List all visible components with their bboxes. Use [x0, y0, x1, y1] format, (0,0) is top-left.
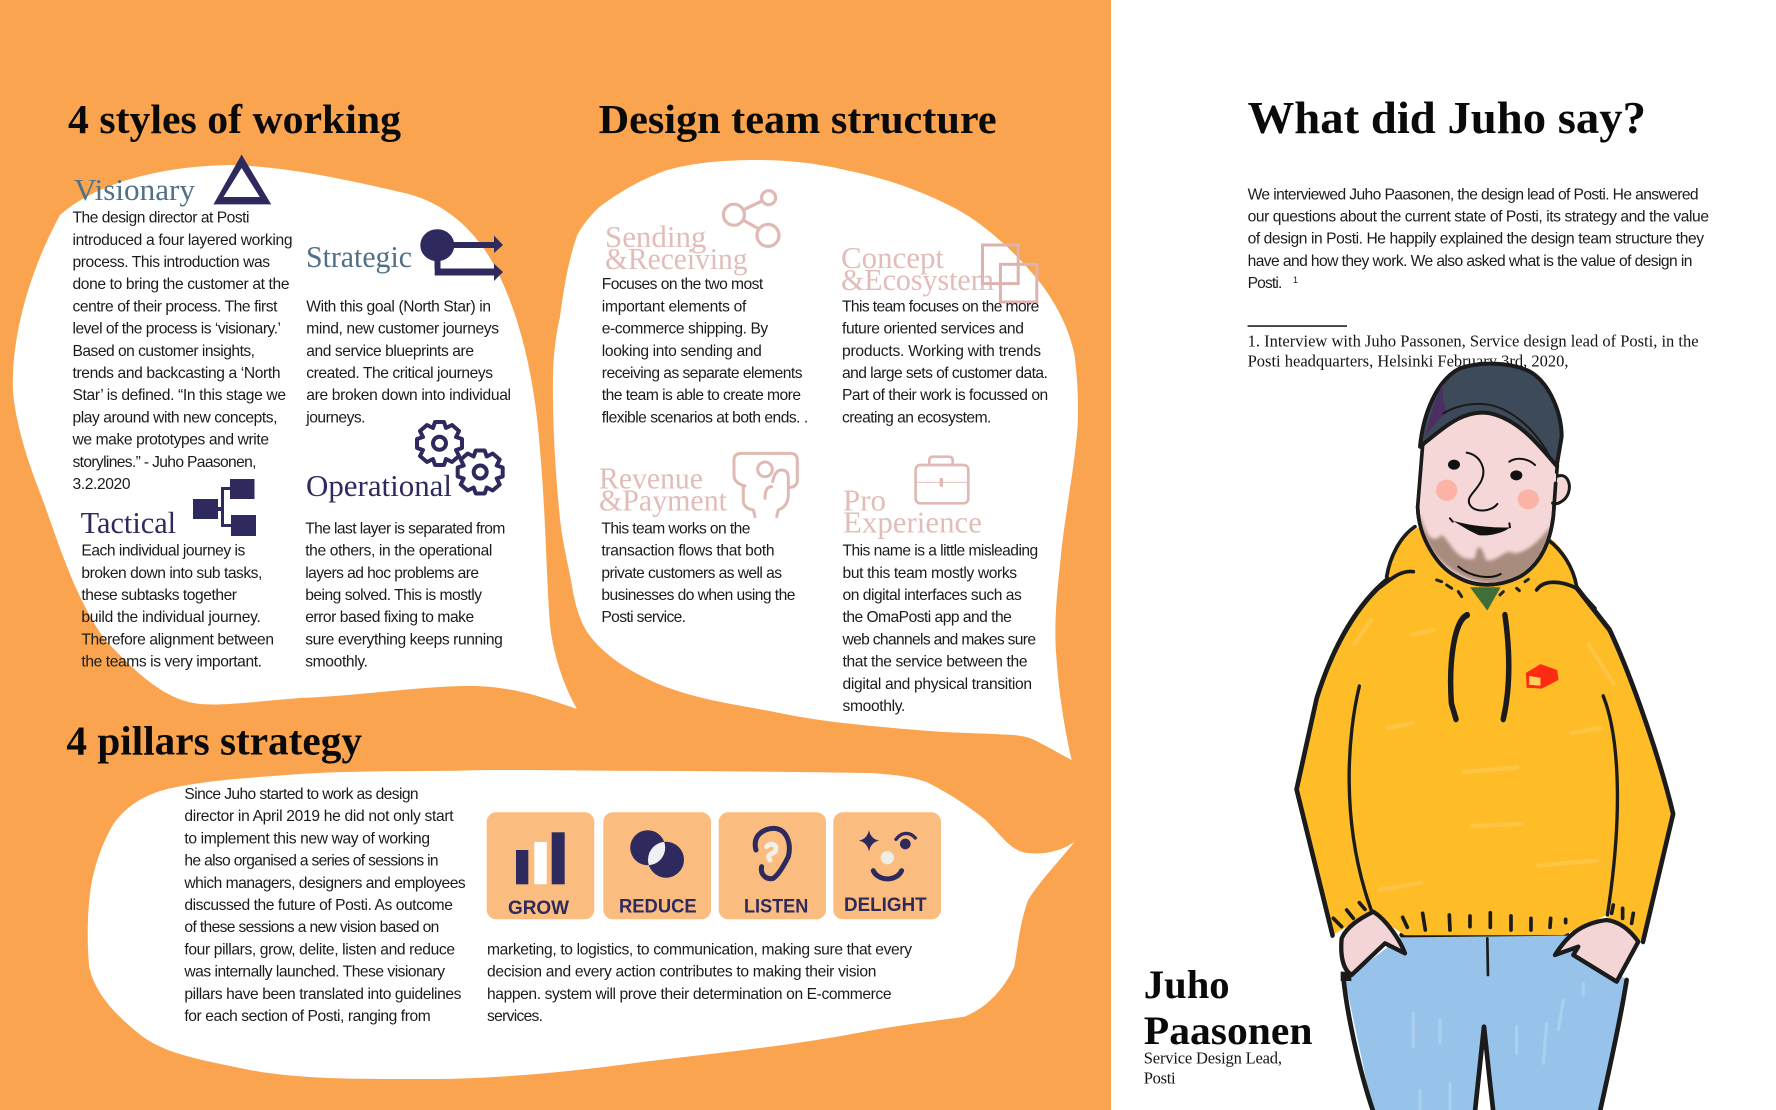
orange background panel [0, 0, 1111, 1110]
text block: interview intro: have and how they work. We also asked what is the value of design in [1248, 253, 1692, 270]
text block: Revenue & Payment: transaction flows that both [601, 543, 775, 560]
text block: Sending & Receiving: the team is able to create more [602, 387, 801, 404]
text block: Pro Experience: web channels and makes sure [842, 631, 1036, 648]
jeans [1343, 933, 1627, 1110]
icon: gears [417, 422, 503, 494]
tile: reduce: REDUCE [619, 895, 697, 917]
text block: Visionary: process. This introduction was [72, 254, 270, 271]
text block: pillars intro: Since Juho started to work as design [184, 786, 419, 803]
text block: Tactical: Each individual journey is [81, 543, 246, 560]
text block: Concept & Ecosystem [842, 298, 1048, 426]
text block: interview intro: 1 [1293, 275, 1298, 285]
subheading: Concept & Ecosystem: &Ecosystem [841, 262, 994, 297]
text block: Operational: sure everything keeps running [305, 631, 503, 648]
tile: grow: GROW [508, 897, 570, 919]
hoodie [1297, 528, 1673, 942]
text block: pillars continued: happen. system will prove their determination on E-commerce [487, 986, 892, 1003]
subheading: Revenue & Payment: Revenue [599, 460, 703, 496]
text block: Revenue & Payment: Posti service. [601, 609, 686, 626]
subheading: Pro Experience: Experience [843, 505, 982, 540]
text block: pillars continued [487, 941, 912, 1025]
text block: Strategic [305, 298, 511, 426]
text block: Revenue & Payment: businesses do when using the [601, 587, 795, 604]
role: Service Design Lead [1144, 1048, 1282, 1088]
hands and hem [1333, 903, 1638, 982]
text block: pillars intro: of these sessions a new vision based on [184, 919, 439, 936]
subheading: Concept & Ecosystem [841, 240, 994, 297]
subheading: Strategic: Strategic [306, 239, 412, 274]
head [1380, 364, 1595, 611]
subheading: Pro Experience: Pro [843, 482, 886, 517]
text block: Tactical: Therefore alignment between [81, 631, 274, 648]
role: Service Design Lead: Posti [1144, 1069, 1176, 1088]
subheading: Operational: Operational [306, 468, 452, 503]
subheading: Pro Experience [843, 482, 982, 540]
text block: pillars intro: director in April 2019 he did not only start [184, 808, 454, 825]
text block: Sending & Receiving: looking into sending and [602, 343, 762, 360]
tile: listen: LISTEN [744, 895, 808, 917]
text block: Concept & Ecosystem: and large sets of customer data. [842, 365, 1048, 382]
tile: reduce [603, 812, 711, 919]
text block: Visionary: storylines.” - Juho Paasonen, [72, 454, 256, 471]
text block: pillars continued: services. [487, 1008, 543, 1025]
text block: Tactical [81, 543, 274, 671]
text block: Strategic: are broken down into individual [306, 387, 511, 404]
text block: Pro Experience: smoothly. [842, 698, 905, 715]
text block: Concept & Ecosystem: products. Working with trends [842, 343, 1041, 360]
text block: Strategic: journeys. [305, 409, 366, 426]
tile: listen [719, 812, 826, 919]
text block: Operational: layers ad hoc problems are [305, 565, 479, 582]
text block: pillars intro: discussed the future of Posti. As outcome [184, 897, 453, 914]
name: Juho Paasonen: Paasonen [1144, 1008, 1312, 1053]
text block: pillars intro: to implement this new way of working [184, 830, 430, 847]
text block: Visionary: level of the process is ‘visionary.’ [72, 321, 281, 338]
role: Service Design Lead: Service Design Lead, [1144, 1048, 1282, 1068]
text block: footnote: 1. Interview with Juho Passonen, Service design lead of Posti, in the [1248, 332, 1699, 351]
text block: pillars intro: four pillars, grow, delite, listen and reduce [184, 941, 455, 958]
text block: pillars continued: marketing, to logistics, to communication, making sure that every [487, 941, 912, 958]
name: Juho Paasonen: Juho [1144, 962, 1230, 1007]
text block: Concept & Ecosystem: Part of their work is focussed on [842, 387, 1048, 404]
tile: grow [487, 812, 594, 919]
text block: Tactical: build the individual journey. [81, 609, 261, 626]
subheading: Visionary: Visionary [74, 172, 195, 207]
panel: 4 pillars strategy [88, 770, 1075, 1079]
tile: delight [833, 812, 941, 919]
text block: interview intro [1248, 186, 1709, 292]
text block: Pro Experience: the OmaPosti app and the [842, 609, 1012, 626]
text block: Visionary: we make prototypes and write [72, 432, 269, 449]
icon: briefcase [916, 457, 968, 503]
text block: Tactical: the teams is very important. [81, 654, 262, 671]
text block: Operational: smoothly. [305, 654, 368, 671]
text block: pillars continued: decision and every action contributes to making their vision [487, 964, 876, 981]
panel: 4 styles of working [13, 154, 577, 709]
text block: interview intro: our questions about the current state of Posti, its strategy and the value [1248, 208, 1709, 226]
text block: footnote [1248, 332, 1699, 371]
text block: Sending & Receiving [602, 276, 808, 426]
text block: pillars intro: was internally launched. These visionary [183, 964, 445, 981]
text block: interview intro: of design in Posti. He happily explained the design team structure they [1248, 231, 1704, 248]
text block: Pro Experience: on digital interfaces such as [842, 587, 1022, 604]
text block: Visionary: introduced a four layered working [72, 232, 292, 249]
icon: share [723, 191, 779, 246]
text block: Pro Experience: digital and physical transition [842, 676, 1032, 693]
subheading: Sending & Receiving: &Receiving [605, 241, 748, 276]
text block: pillars intro: which managers, designers and employees [183, 875, 466, 892]
subheading: Tactical: Tactical [81, 505, 176, 540]
icon: overlapping squares [982, 245, 1037, 302]
text block: pillars intro: pillars have been translated into guidelines [184, 986, 462, 1003]
text block: Sending & Receiving: Focuses on the two most [602, 276, 764, 293]
subheading: Sending & Receiving [605, 219, 748, 276]
text block: Visionary: trends and backcasting a ‘North [72, 365, 280, 382]
subheading: Concept & Ecosystem: Concept [841, 240, 944, 275]
text block: Sending & Receiving: important elements of [602, 298, 747, 315]
text block: Strategic: mind, new customer journeys [306, 321, 499, 338]
subheading: Sending & Receiving: Sending [605, 219, 706, 254]
text block: Pro Experience [842, 543, 1038, 715]
text block: Revenue & Payment [601, 520, 795, 626]
text block: Pro Experience: that the service between the [842, 654, 1028, 671]
text block: interview intro: We interviewed Juho Paasonen, the design lead of Posti. He answered [1248, 186, 1699, 203]
text block: Tactical: these subtasks together [81, 587, 237, 604]
text block: pillars intro: he also organised a series of sessions in [184, 853, 439, 870]
text block: Visionary: 3.2.2020 [72, 476, 131, 493]
name: Juho Paasonen [1144, 962, 1312, 1053]
illustration: Juho portrait [1297, 364, 1673, 1110]
text block: Visionary: Based on customer insights, [72, 343, 255, 360]
icon: hierarchy [193, 479, 256, 536]
text block: Visionary: play around with new concepts, [72, 409, 278, 426]
text block: Visionary: The design director at Posti [72, 210, 250, 227]
text block: Visionary [72, 210, 292, 493]
text block: Concept & Ecosystem: future oriented services and [842, 321, 1024, 338]
text block: Concept & Ecosystem: This team focuses on the more [842, 298, 1039, 315]
text block: Sending & Receiving: e-commerce shipping. By [602, 321, 768, 338]
text block: Visionary: done to bring the customer at the [72, 276, 290, 293]
text block: Strategic: With this goal (North Star) in [306, 298, 491, 315]
text block: Concept & Ecosystem: creating an ecosystem. [842, 409, 991, 426]
text block: pillars intro: for each section of Posti, ranging from [184, 1008, 431, 1025]
text block: Visionary: centre of their process. The first [72, 298, 278, 315]
text block: Operational: being solved. This is mostly [305, 587, 482, 604]
heading: design team structure: Design team structure [599, 96, 997, 142]
heading: 4 pillars strategy: 4 pillars strategy [66, 717, 362, 763]
text block: Pro Experience: This name is a little misleading [842, 543, 1038, 560]
icon: strategic arrows [420, 229, 503, 281]
text block: Operational [305, 520, 505, 671]
text block: Operational: the others, in the operational [305, 543, 492, 560]
text block: Operational: The last layer is separated from [305, 520, 505, 537]
heading: 4 styles of working: 4 styles of working [68, 96, 402, 142]
heading: What did Juho say?: What did Juho say? [1248, 93, 1646, 143]
icon: payment hand [734, 453, 797, 517]
text block: Sending & Receiving: receiving as separate elements [602, 365, 803, 382]
tile: delight: DELIGHT [844, 894, 927, 916]
text block: Pro Experience: but this team mostly works [842, 565, 1017, 582]
text block: Operational: error based fixing to make [305, 609, 474, 626]
text block: pillars intro [183, 786, 466, 1025]
subheading: Revenue & Payment [599, 460, 727, 517]
text block: Revenue & Payment: This team works on the [601, 520, 750, 537]
text block: footnote: Posti headquarters, Helsinki February 3rd, 2020, [1248, 352, 1568, 371]
text block: interview intro: Posti. [1248, 275, 1282, 292]
panel: design team structure [553, 160, 1078, 760]
text block: Tactical: broken down into sub tasks, [81, 565, 262, 582]
text block: Sending & Receiving: flexible scenarios at both ends. . [602, 409, 808, 426]
text block: Strategic: and service blueprints are [306, 343, 474, 360]
text block: Revenue & Payment: private customers as well as [601, 565, 782, 582]
text block: Strategic: created. The critical journeys [306, 365, 493, 382]
icon: triangle [214, 154, 271, 204]
text block: Visionary: Star’ is defined. “In this stage we [72, 387, 286, 404]
subheading: Revenue & Payment: &Payment [599, 482, 727, 517]
